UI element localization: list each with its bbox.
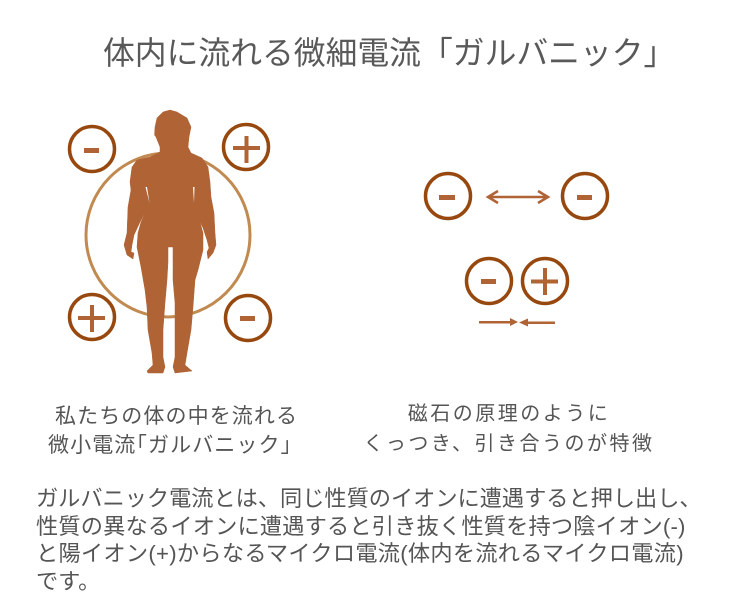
icon: repelling minus left — [426, 174, 470, 218]
caption right — [363, 403, 655, 455]
body text — [36, 486, 702, 594]
diagram: body and ions — [68, 110, 610, 374]
caption right: 磁石の原理のように — [408, 403, 610, 425]
icon: plus bottom left — [70, 294, 114, 340]
icon: attracting minus — [466, 258, 512, 304]
caption right: くっつき、引き合うのが特徴 — [363, 433, 655, 455]
body text: です。 — [36, 568, 100, 594]
icon: minus top left — [70, 126, 114, 172]
arrow: double headed — [488, 191, 548, 203]
icon: minus bottom right — [226, 296, 270, 340]
title: 体内に流れる微細電流「ガルバニック」 — [103, 35, 675, 71]
caption left: 微小電流｢ガルバニック｣ — [48, 434, 292, 457]
large circle around body — [86, 153, 250, 317]
arrow: right pointing left — [519, 318, 555, 326]
body text: と陽イオン(+)からなるマイクロ電流(体内を流れるマイクロ電流) — [36, 541, 684, 566]
icon: repelling minus right — [562, 174, 608, 218]
body text: 性質の異なるイオンに遭遇すると引き抜く性質を持つ陰イオン(-) — [36, 514, 686, 538]
arrow: left pointing right — [479, 318, 518, 326]
caption left: 私たちの体の中を流れる — [55, 405, 298, 428]
body text: ガルバニック電流とは、同じ性質のイオンに遭遇すると押し出し、 — [36, 486, 702, 511]
caption left — [48, 405, 298, 457]
icon: attracting plus — [522, 258, 568, 304]
icon: plus top right — [224, 124, 268, 170]
icon: body silhouette — [124, 110, 216, 373]
